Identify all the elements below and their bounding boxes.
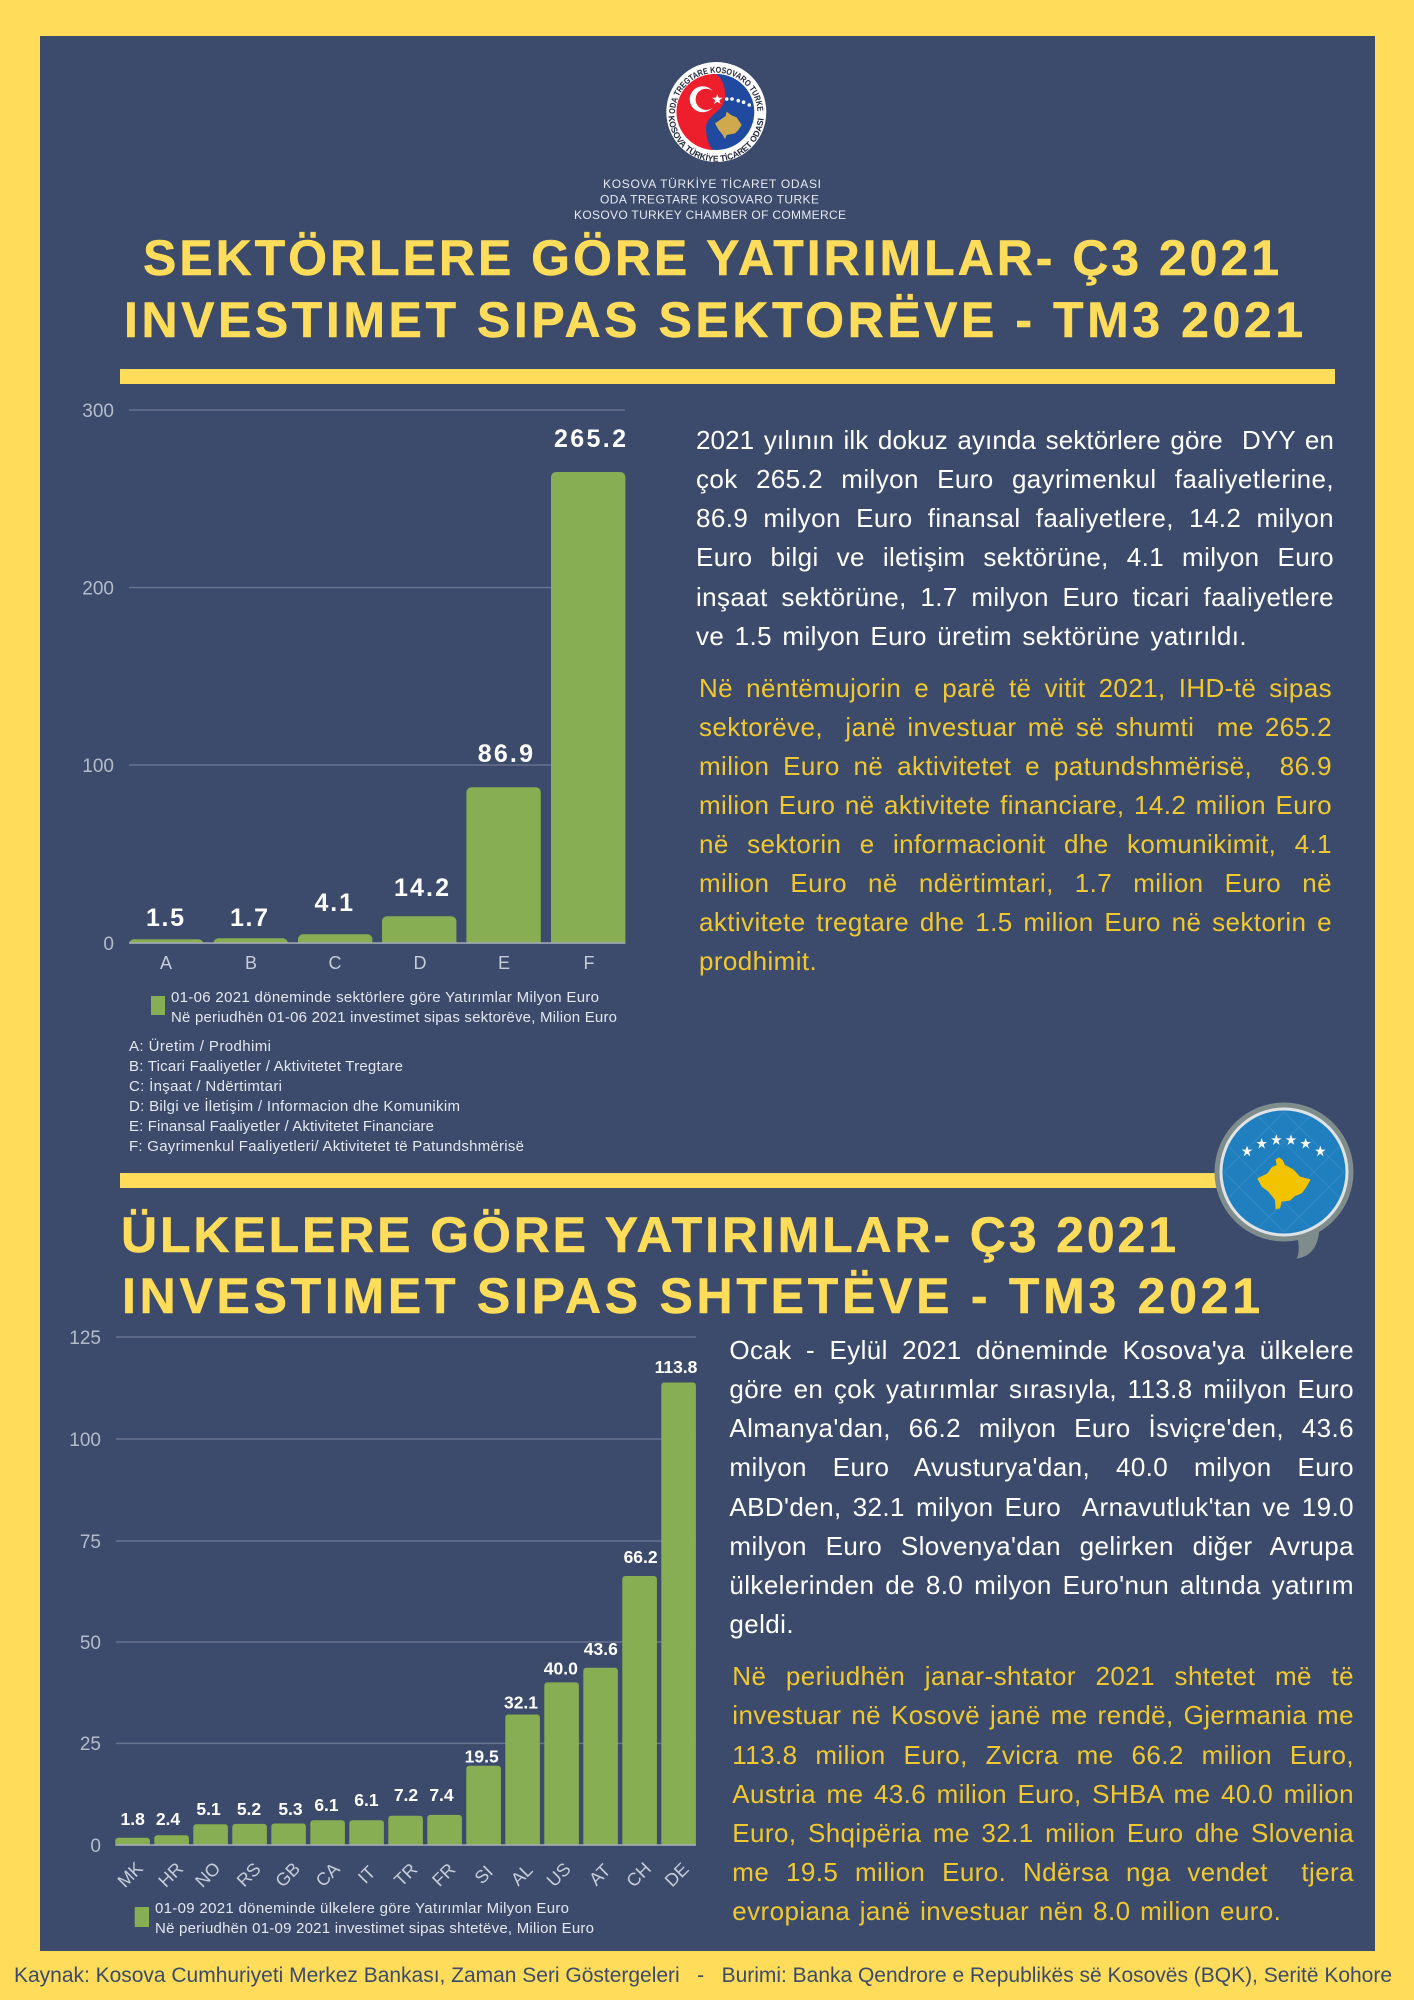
text block: organisation names: KOSOVO TURKEY CHAMBER OF COMMERCE xyxy=(574,208,846,222)
paragraph: Turkish country summary: ülkelerinden de 8.0 milyon Euro'nun altında yatırım xyxy=(729,1570,1354,1600)
bar chart: investments by sector: B xyxy=(245,953,257,973)
bar chart: investments by country: TR xyxy=(390,1859,421,1890)
text block: sector key A to F: D: Bilgi ve İletişim / Informacion dhe Komunikim xyxy=(129,1097,460,1115)
icon: chamber of commerce logo: ODA TREGTARE KOSOVARO TURKE xyxy=(669,66,764,114)
bar chart: investments by country: 32.1 xyxy=(504,1692,538,1712)
bar chart: investments by country: CH xyxy=(622,1858,655,1891)
icon: Kosovo flag speech bubble xyxy=(1214,1102,1354,1258)
paragraph: Albanian country summary: me 19.5 milion Euro. Ndërsa nga vendet tjera xyxy=(732,1857,1354,1887)
text block: organisation names xyxy=(574,177,846,222)
paragraph: Albanian country summary: Austria me 43.6 milion Euro, SHBA me 40.0 milion xyxy=(732,1779,1354,1809)
icon: chamber of commerce logo: KOSOVA TÜRKİYE TİCARET ODASI xyxy=(668,116,764,162)
bar chart: investments by country: US xyxy=(543,1859,575,1891)
heading: investments by sector: INVESTIMET SIPAS SEKTORËVE - TM3 2021 xyxy=(124,292,1303,348)
bar chart: investments by country: 40.0 xyxy=(544,1658,578,1678)
bar chart: investments by sector: C xyxy=(328,953,342,973)
paragraph: Turkish country summary: milyon Euro Avusturya'dan, 40.0 milyon Euro xyxy=(729,1452,1354,1482)
text block: sector key A to F: F: Gayrimenkul Faaliyetleri/ Aktivitetet të Patundshmërisë xyxy=(129,1138,524,1155)
bar chart: investments by sector: F xyxy=(584,953,594,973)
paragraph: Turkish sector summary: çok 265.2 milyon Euro gayrimenkul faaliyetlerine, xyxy=(696,464,1334,494)
bar chart: investments by country: 50 xyxy=(80,1633,101,1654)
bar chart: investments by country: HR xyxy=(154,1858,187,1891)
paragraph: Turkish country summary: Ocak - Eylül 2021 döneminde Kosova'ya ülkelere xyxy=(729,1335,1354,1365)
bar chart: investments by country: 5.2 xyxy=(237,1799,261,1819)
paragraph: Turkish sector summary: ve 1.5 milyon Euro üretim sektörüne yatırıldı. xyxy=(696,621,1247,651)
paragraph: Albanian sector summary: sektorëve, janë investuar më së shumti me 265.2 xyxy=(699,712,1332,742)
legend: sector chart: 01-06 2021 döneminde sektörlere göre Yatırımlar Milyon Euro xyxy=(171,989,599,1006)
bar chart: investments by country: 5.3 xyxy=(278,1799,303,1819)
bar chart: investments by country: 125 xyxy=(69,1328,101,1349)
paragraph: Turkish country summary: milyon Euro Slovenya'dan gelirken diğer Avrupa xyxy=(729,1531,1354,1561)
bar chart: investments by country: 6.1 xyxy=(354,1790,379,1810)
bar chart: investments by sector: E xyxy=(498,953,510,973)
paragraph: Turkish sector summary: 2021 yılının ilk dokuz ayında sektörlere göre DYY en xyxy=(696,425,1334,455)
paragraph: Turkish sector summary: 86.9 milyon Euro finansal faaliyetlere, 14.2 milyon xyxy=(696,503,1334,533)
text block: organisation names: KOSOVA TÜRKİYE TİCARET ODASI xyxy=(603,177,821,191)
bar chart: investments by country: DE xyxy=(661,1859,693,1891)
paragraph: Turkish sector summary: inşaat sektörüne, 1.7 milyon Euro ticari faaliyetlere xyxy=(696,582,1334,612)
bar chart: investments by country: 0 xyxy=(90,1836,101,1857)
bar chart: investments by country: 2.4 xyxy=(156,1809,180,1829)
heading: investments by country: INVESTIMET SIPAS SHTETËVE - TM3 2021 xyxy=(122,1268,1260,1324)
paragraph: Turkish country summary: geldi. xyxy=(729,1609,794,1639)
paragraph: Albanian country summary xyxy=(732,1661,1354,1926)
bar chart: investments by sector: 1.5 xyxy=(146,904,184,932)
bar chart: investments by country xyxy=(69,1328,698,1891)
paragraph: Albanian country summary: Në periudhën janar-shtator 2021 shtetet më të xyxy=(732,1661,1354,1691)
bar chart: investments by country: SI xyxy=(471,1862,497,1888)
bar chart: investments by country: 25 xyxy=(80,1734,101,1755)
legend: country chart xyxy=(134,1900,594,1937)
text block: sector key A to F: A: Üretim / Prodhimi xyxy=(129,1037,271,1055)
heading: investments by country: ÜLKELERE GÖRE YATIRIMLAR- Ç3 2021 xyxy=(121,1207,1176,1263)
paragraph: Turkish sector summary xyxy=(696,425,1334,651)
paragraph: Albanian sector summary: aktivitete tregtare dhe 1.5 milion Euro në sektorin e xyxy=(699,907,1332,937)
legend: country chart: 01-09 2021 döneminde ülkelere göre Yatırımlar Milyon Euro xyxy=(155,1900,569,1917)
paragraph: Albanian country summary: 113.8 milion Euro, Zvicra me 66.2 milion Euro, xyxy=(732,1740,1354,1770)
legend: sector chart xyxy=(151,989,617,1026)
footer: source line: Kaynak: Kosova Cumhuriyeti Merkez Bankası, Zaman Seri Göstergeleri - Burimi: Banka Qendrore e Republikës së Kosovës (BQK), Seritë Kohore xyxy=(14,1964,1392,1987)
text block: sector key A to F: C: İnşaat / Ndërtimtari xyxy=(129,1077,282,1095)
bar chart: investments by sector: D xyxy=(414,953,426,973)
paragraph: Turkish country summary: Almanya'dan, 66.2 milyon Euro İsviçre'den, 43.6 xyxy=(729,1413,1354,1443)
paragraph: Turkish sector summary: Euro bilgi ve iletişim sektörüne, 4.1 milyon Euro xyxy=(696,542,1334,572)
bar chart: investments by sector: 200 xyxy=(82,578,114,600)
paragraph: Albanian sector summary: milion Euro në ndërtimtari, 1.7 milion Euro në xyxy=(699,868,1332,898)
bar chart: investments by country: 1.8 xyxy=(121,1809,145,1829)
paragraph: Turkish country summary xyxy=(729,1335,1354,1639)
icon: chamber of commerce logo xyxy=(666,62,766,162)
bar chart: investments by country: MK xyxy=(114,1858,147,1891)
bar chart: investments by country: 66.2 xyxy=(624,1547,658,1567)
paragraph: Albanian country summary: evropiana janë investuar nën 8.0 milion euro. xyxy=(732,1896,1281,1926)
paragraph: Turkish country summary: ABD'den, 32.1 milyon Euro Arnavutluk'tan ve 19.0 xyxy=(729,1492,1354,1522)
text block: organisation names: ODA TREGTARE KOSOVARO TURKE xyxy=(600,192,819,206)
bar chart: investments by sector: 100 xyxy=(82,756,114,777)
paragraph: Albanian country summary: Euro, Shqipëria me 32.1 milion Euro dhe Slovenia xyxy=(732,1818,1354,1848)
bar chart: investments by country: 75 xyxy=(80,1532,101,1553)
bar chart: investments by country: 100 xyxy=(69,1430,101,1451)
bar chart: investments by country: 113.8 xyxy=(655,1357,698,1377)
heading: investments by sector xyxy=(124,230,1303,348)
bar chart: investments by country: IT xyxy=(354,1862,379,1887)
bar chart: investments by country: NO xyxy=(191,1858,224,1891)
bar chart: investments by country: RS xyxy=(233,1859,265,1891)
paragraph: Albanian sector summary: prodhimit. xyxy=(699,946,817,976)
paragraph: Albanian sector summary: në sektorin e informacionit dhe komunikimit, 4.1 xyxy=(699,829,1332,859)
paragraph: Albanian sector summary xyxy=(699,672,1332,976)
bar chart: investments by sector xyxy=(82,401,626,973)
paragraph: Turkish country summary: göre en çok yatırımlar sırasıyla, 113.8 miilyon Euro xyxy=(729,1374,1354,1404)
legend: country chart: Në periudhën 01-09 2021 investimet sipas shtetëve, Milion Euro xyxy=(155,1920,594,1937)
heading: investments by sector: SEKTÖRLERE GÖRE YATIRIMLAR- Ç3 2021 xyxy=(143,230,1279,286)
paragraph: Albanian sector summary: Në nëntëmujorin e parë të vitit 2021, IHD-të sipas xyxy=(699,672,1332,702)
bar chart: investments by country: 5.1 xyxy=(196,1799,221,1819)
text block: sector key A to F: B: Ticari Faaliyetler / Aktivitetet Tregtare xyxy=(129,1058,403,1075)
bar chart: investments by country: 19.5 xyxy=(465,1747,499,1767)
bar chart: investments by country: GB xyxy=(271,1858,304,1891)
paragraph: Albanian country summary: investuar në Kosovë janë me rendë, Gjermania me xyxy=(732,1700,1354,1730)
paragraph: Albanian sector summary: milion Euro në aktivitete financiare, 14.2 milion Euro xyxy=(699,790,1332,820)
bar chart: investments by sector: 300 xyxy=(82,401,114,422)
bar chart: investments by sector: 265.2 xyxy=(554,425,626,453)
bar chart: investments by country: AL xyxy=(507,1860,537,1890)
bar chart: investments by sector: 86.9 xyxy=(478,740,533,768)
bar chart: investments by country: 6.1 xyxy=(314,1795,339,1815)
paragraph: Albanian sector summary: milion Euro në aktivitetet e patundshmërisë, 86.9 xyxy=(699,751,1332,781)
bar chart: investments by country: 7.4 xyxy=(429,1785,454,1805)
bar chart: investments by sector: 4.1 xyxy=(314,889,353,917)
bar chart: investments by country: FR xyxy=(428,1859,459,1890)
bar chart: investments by sector: 14.2 xyxy=(394,874,449,902)
legend: sector chart: Në periudhën 01-06 2021 investimet sipas sektorëve, Milion Euro xyxy=(171,1009,617,1026)
heading: investments by country xyxy=(121,1207,1260,1324)
text block: sector key A to F xyxy=(129,1037,524,1155)
bar chart: investments by sector: 1.7 xyxy=(230,904,268,932)
bar chart: investments by country: AT xyxy=(585,1860,614,1889)
bar chart: investments by country: 43.6 xyxy=(584,1639,618,1659)
bar chart: investments by sector: A xyxy=(160,953,172,973)
bar chart: investments by country: CA xyxy=(312,1859,344,1891)
bar chart: investments by sector: 0 xyxy=(103,934,114,955)
bar chart: investments by country: 7.2 xyxy=(394,1785,418,1805)
text block: sector key A to F: E: Finansal Faaliyetler / Aktivitetet Financiare xyxy=(129,1118,434,1135)
